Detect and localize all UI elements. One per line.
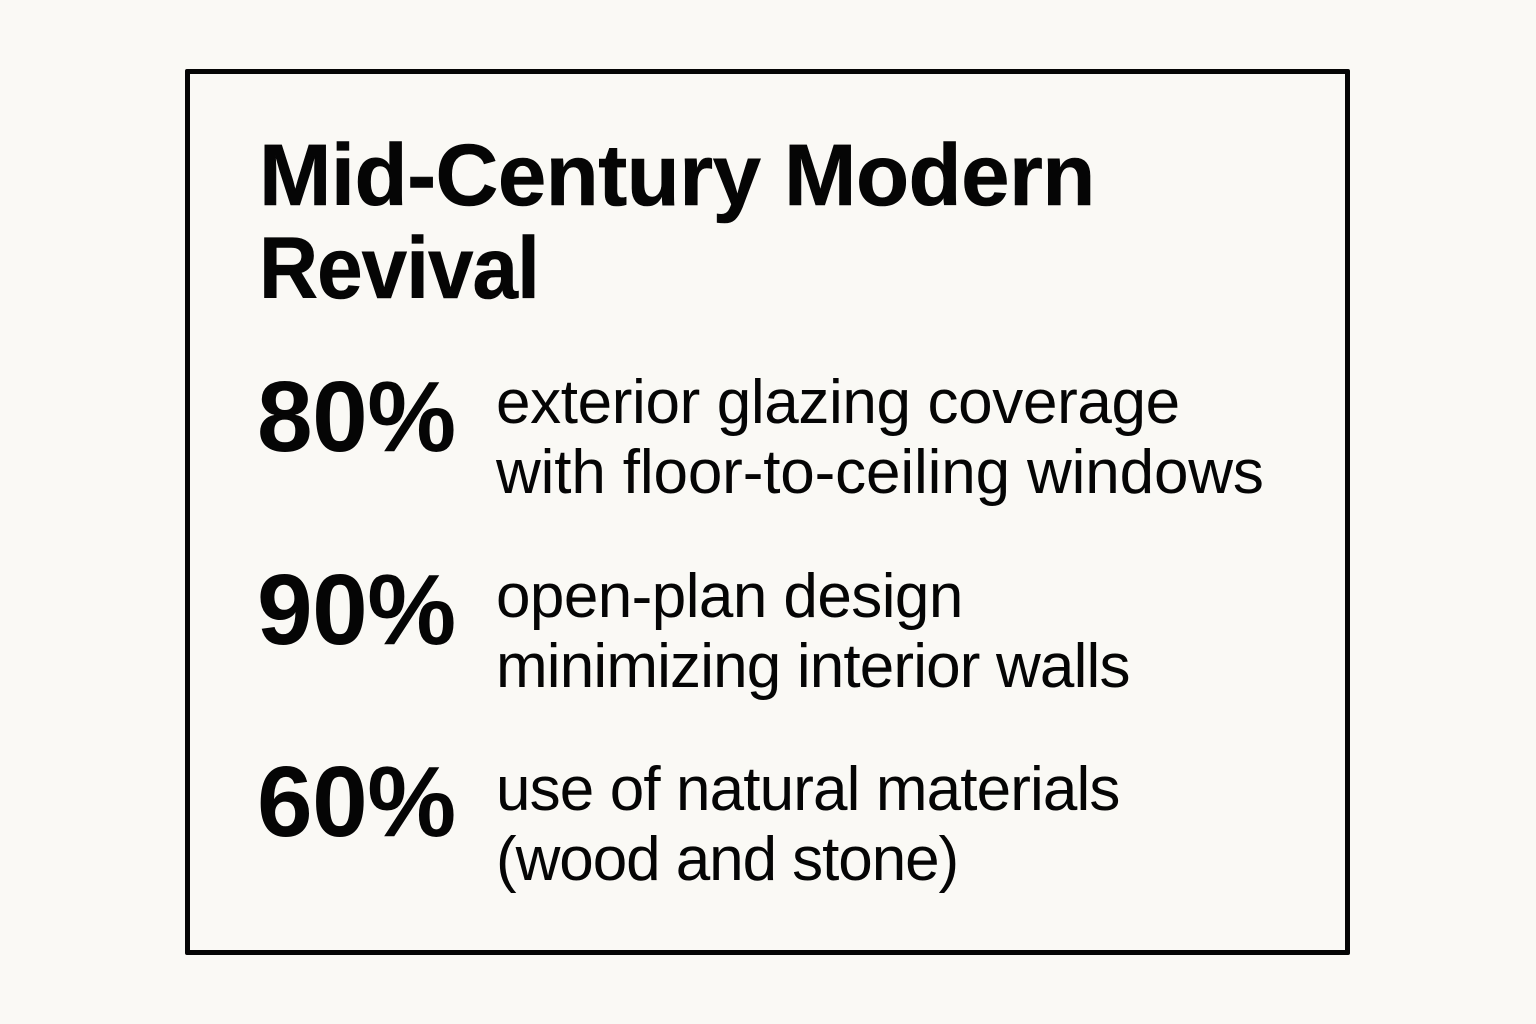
description: exterior glazing <box>496 368 1264 507</box>
title <box>259 127 1095 317</box>
stat: 90%: 90% <box>257 554 456 666</box>
description: exterior glazing: exterior glazing coverage <box>496 368 1180 437</box>
description: natural materials: (wood and stone) <box>496 825 958 894</box>
description: open-plan design: minimizing interior walls <box>496 632 1130 701</box>
description: open-plan design <box>496 562 1130 701</box>
title: Mid-Century Modern <box>259 127 1095 224</box>
description: natural materials <box>496 755 1120 894</box>
description: natural materials: use of natural materials <box>496 755 1120 824</box>
description: exterior glazing: with floor-to-ceiling windows <box>496 438 1264 507</box>
stat: 80%: 80% <box>257 361 456 473</box>
title: Revival <box>259 220 539 317</box>
description: open-plan design: open-plan design <box>496 562 963 631</box>
stat: 60%: 60% <box>257 746 456 858</box>
panel: bordered frame <box>185 69 1350 955</box>
